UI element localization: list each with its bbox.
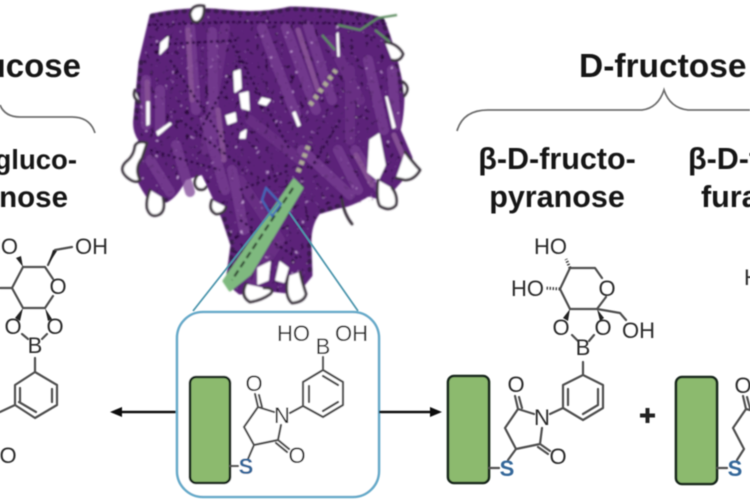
label: beta-D-fructopyranose: β-D-fructo- [478,142,636,176]
atom labels: O [288,443,306,468]
arrow: to fructose complex [379,407,442,417]
sulfur atom: S [500,456,514,481]
atom labels: O [46,314,64,339]
bracket: fructose [457,90,750,131]
wedge bonds [15,250,57,321]
atom labels: O [549,444,567,469]
protein speckle dark [132,14,412,292]
stereo bonds [563,309,604,321]
label: beta-D-fructopyranose: pyranose [489,180,625,214]
zoom lines from protein to inset [193,202,358,311]
protein outer loops [122,6,420,303]
atom labels [0,234,108,468]
atom labels: B [316,334,330,359]
bonds [489,268,626,468]
atom labels: O [552,315,570,340]
atom labels: OH [335,321,368,346]
atom labels [507,234,655,469]
bonds [717,396,750,468]
atom labels: HO [277,321,310,346]
atom labels [734,265,750,398]
bonds: succinimide and phenyl [230,357,343,466]
inset frame [177,312,379,497]
atom labels: OH [75,234,108,259]
protein block [448,376,489,483]
protein block [676,377,717,484]
atom labels: O [507,372,525,397]
atom labels: B [28,333,42,358]
atom labels: HO [534,234,567,259]
protein edge beads [136,9,402,282]
atom labels: O [4,314,22,339]
protein speckle light [132,14,412,292]
molecule: fructopyranose boronate on protein [448,234,655,483]
protein silhouette [132,9,410,292]
protein white gaps [147,33,395,284]
sulfur atom: S [728,456,742,481]
bonds: glucose ring and phenyl ring [0,247,72,418]
atom labels: HO [511,276,544,301]
sulfur atom: S [239,454,253,479]
highlight marker on helix [262,188,281,216]
protein light strands [146,26,404,285]
atom labels: O [49,274,67,299]
bracket: glucose [0,105,95,133]
atom labels [245,321,368,468]
atom labels: O [594,315,612,340]
protein: nanopore ribbon structure [122,6,420,303]
atom labels: OH [622,318,655,343]
plus sign [640,408,655,423]
molecule: fructofuranose boronate on protein [676,265,750,484]
protein green subunit loop [322,15,397,50]
protein block [190,377,230,483]
atom labels: N [274,403,290,428]
atom labels: B [576,335,590,360]
protein dark backbone texture [148,22,385,260]
hashed bonds [545,259,570,289]
atom labels: O [245,371,263,396]
atom labels: O [598,276,616,301]
arrow: to glucose complex [110,407,177,417]
green helix strand [224,70,336,290]
panel: inset boronic acid linker [177,312,379,497]
atom labels: N [534,405,550,430]
molecule: glucose boronate ester [0,234,108,468]
heading: D-fructose: D-fructose [579,48,747,85]
